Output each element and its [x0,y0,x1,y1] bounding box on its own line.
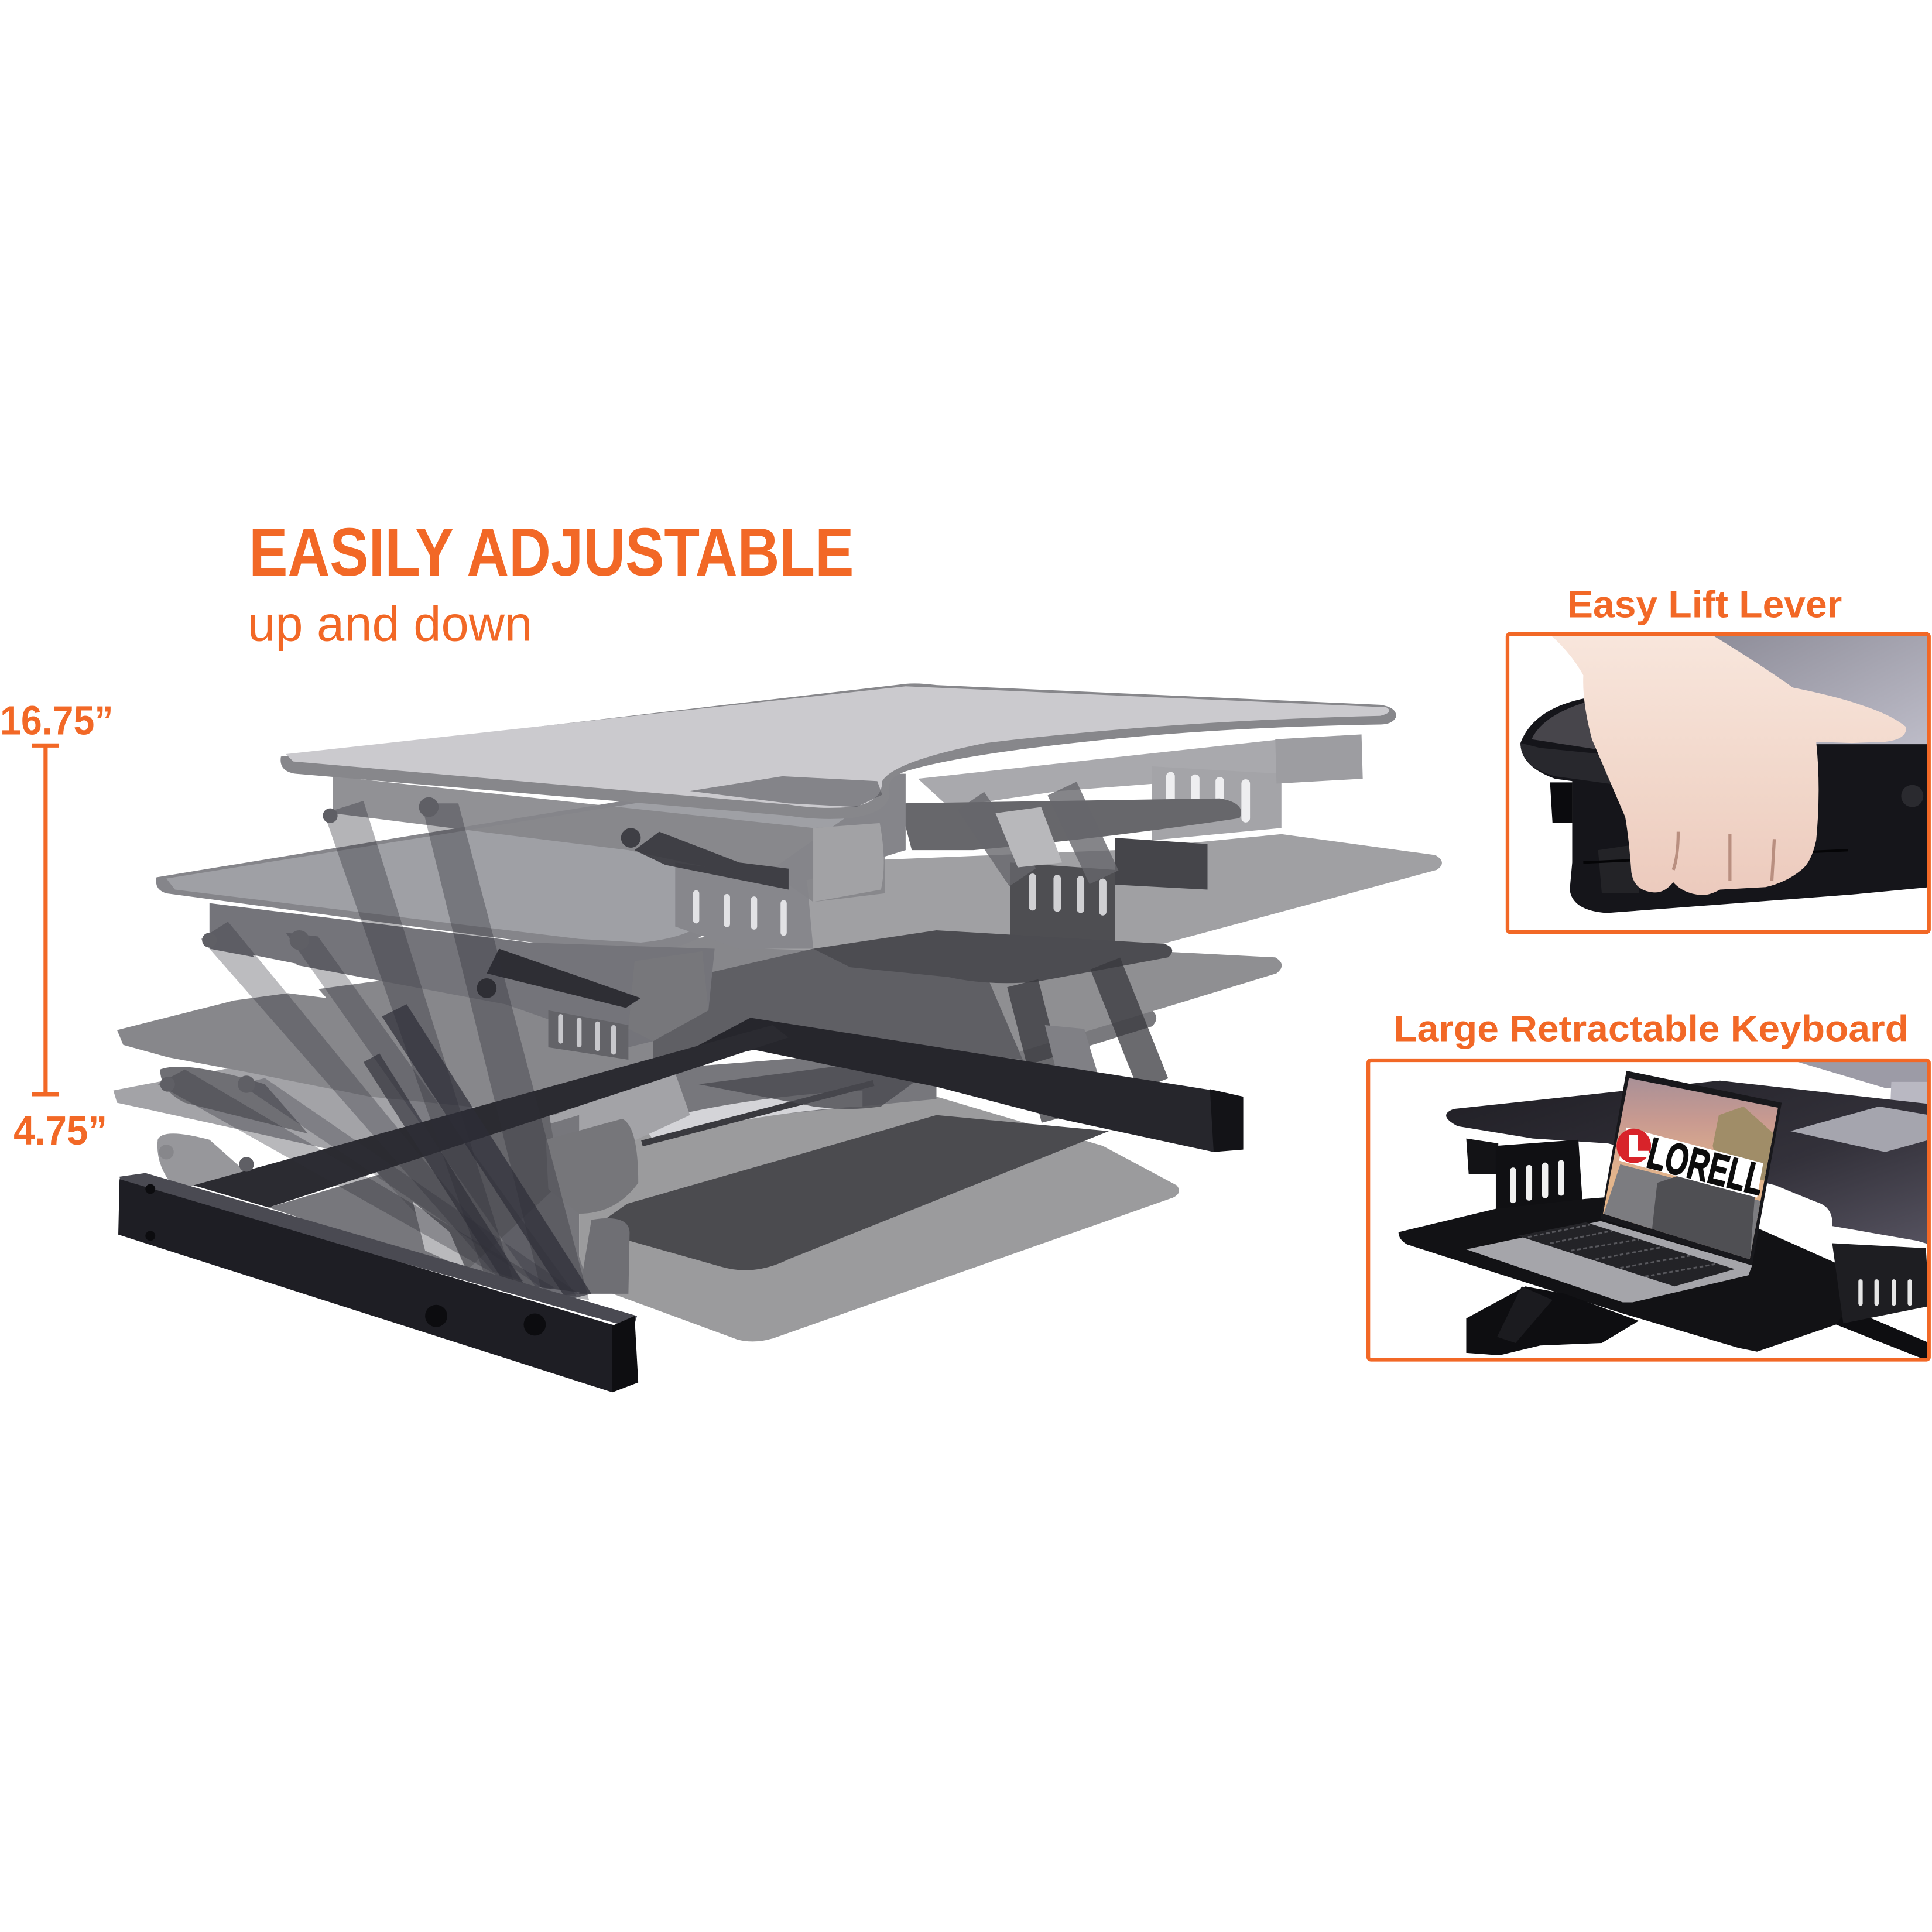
feet and arms [1466,1286,1639,1355]
subtitle: up and down [248,596,532,651]
logo mark [1616,1129,1651,1163]
right bracket with slots, top position [1152,734,1363,840]
upper desk [1446,1081,1930,1245]
base bolts [145,1184,546,1335]
lowest keyboard tray [579,1097,1179,1341]
keyboard tray B [764,936,1282,1062]
second position right wing [899,799,1241,850]
panel: easy lift lever photo [1508,634,1930,932]
label: maximum height: 16.75” [0,697,114,743]
dimension line [32,745,59,1094]
desk and lever in black [1520,697,1930,913]
heading: easy lift lever: Easy Lift Lever [1567,583,1842,625]
slotted plate and knob [1466,1139,1498,1174]
logo wordmark: LORELL [1643,1128,1769,1205]
monitor backdrop [1711,635,1930,745]
laptop screen bezel [1601,1071,1782,1265]
central mass [653,949,1023,1070]
second tier bracket with handle [210,903,715,1060]
laptop wallpaper [1603,1078,1778,1259]
monitor base [1790,1107,1930,1152]
top desk tier [280,683,1396,819]
second desk tier [156,774,906,953]
dark pad, lower wing [813,930,1172,983]
panel frame [1368,1060,1929,1359]
light gap between upper arms [996,807,1062,868]
keyboard tray A [764,834,1442,958]
hand [1550,635,1906,895]
under-rail mass [269,1115,591,1294]
panel: retractable keyboard photo [1368,1060,1930,1362]
label: minimum height: 4.75” [13,1108,107,1153]
second position right arms [1023,964,1153,1119]
pivot bolts [159,797,640,1171]
laptop base [1466,1221,1752,1303]
panel frame [1508,634,1929,932]
keyboard tray [1399,1193,1843,1352]
top tier bracket [333,776,885,902]
fill behind lower centre [579,1047,936,1146]
light crescent [642,1091,862,1140]
thin bar [642,1083,873,1143]
handle [635,832,789,890]
lowest desk tier [114,1010,690,1183]
rail: cross tube [193,1025,789,1207]
right bracket with slots, second position [1010,838,1207,949]
front base bar [118,1173,638,1392]
top tier slotted plate [675,862,813,949]
laptop keyboard [1518,1222,1735,1286]
monitor [1794,1061,1930,1088]
title: EASILY ADJUSTABLE [249,514,854,590]
low centre knob [546,1119,638,1214]
right scissor arms, upper [971,789,1104,877]
tab seen through [698,1062,918,1109]
dark inner tray [590,1115,1109,1270]
tab overlay [690,776,882,807]
scissor arms [157,801,591,1300]
white gap, lower left [252,955,327,998]
main illustration: stacked desk riser positions [114,683,1442,1392]
height range dimension [0,697,114,1153]
rail: back bar [653,1018,1244,1152]
right bracket [1832,1244,1930,1323]
low desk tier [117,918,850,1115]
keyboard tray C [862,1004,1156,1078]
frame beneath top wing [918,739,1282,807]
heading: keyboard: Large Retractable Keyboard [1393,1008,1909,1049]
logo band [1619,1128,1763,1198]
